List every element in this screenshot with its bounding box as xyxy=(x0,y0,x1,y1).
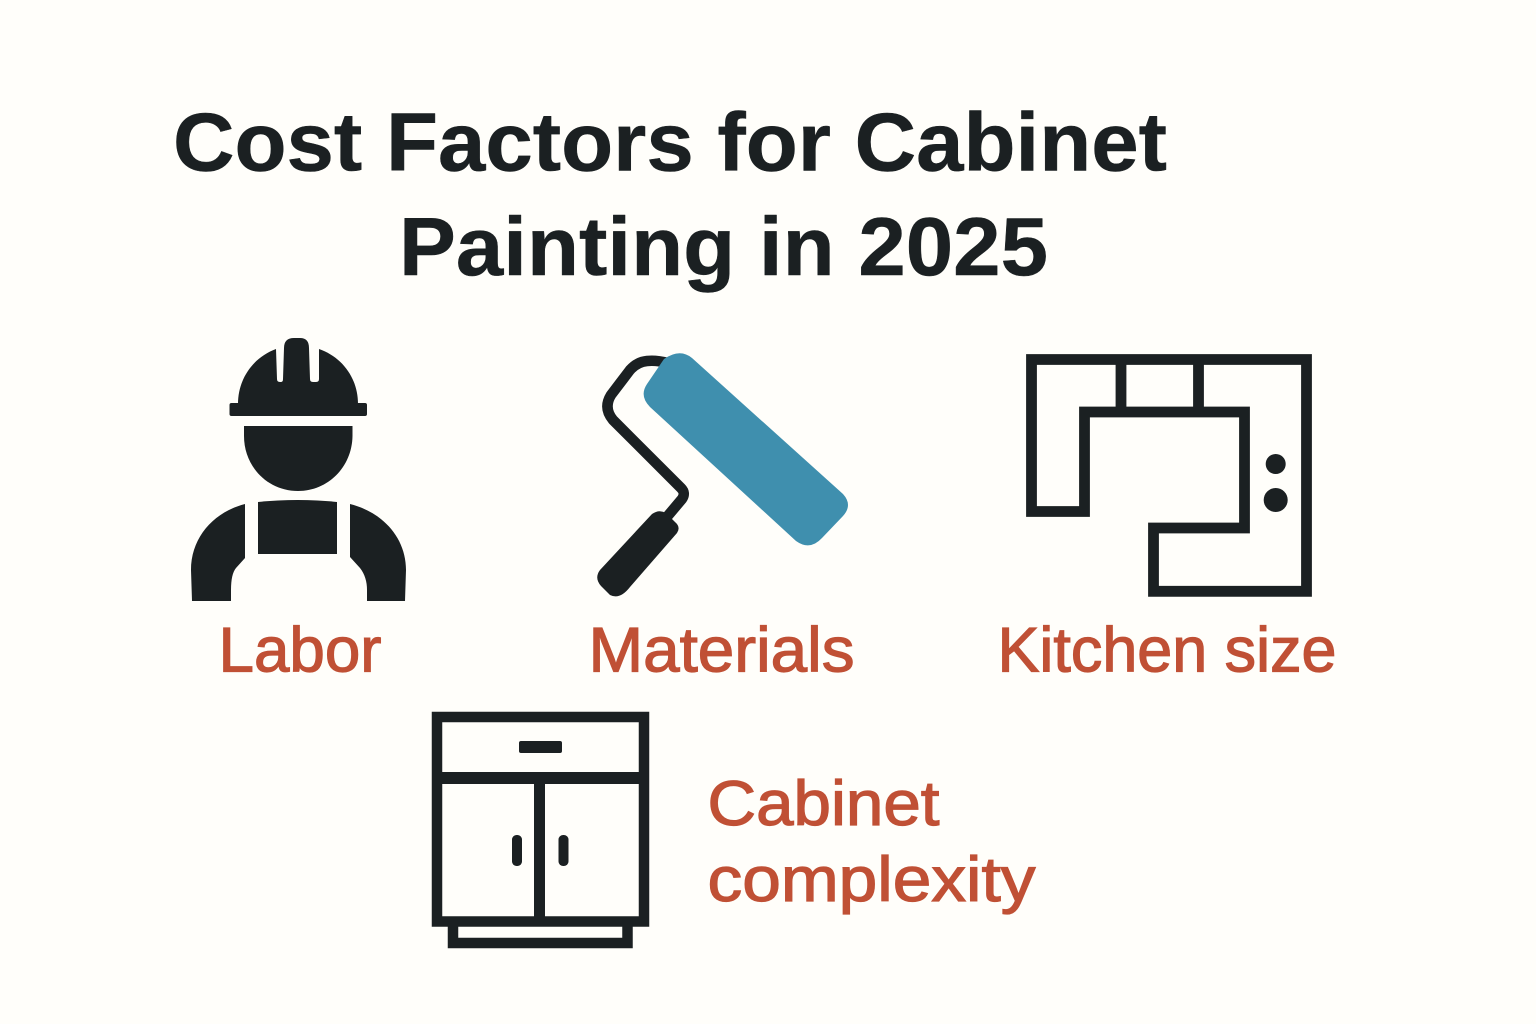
title: Cost Factors for Cabinet xyxy=(173,96,1167,188)
icon: cabinet xyxy=(437,717,644,943)
icon: paint roller xyxy=(597,353,848,596)
title: Painting in 2025 xyxy=(399,200,1048,293)
icon: kitchen floor plan xyxy=(1032,360,1306,591)
label: Materials: Materials xyxy=(588,616,854,686)
label: Labor: Labor xyxy=(218,616,382,686)
icon: worker xyxy=(191,338,406,601)
label: Cabinet complexity xyxy=(708,769,1036,915)
label: Cabinet complexity: Cabinet xyxy=(708,769,940,839)
label: Kitchen size: Kitchen size xyxy=(998,616,1336,686)
label: Cabinet complexity: complexity xyxy=(708,845,1036,915)
title xyxy=(173,96,1167,293)
